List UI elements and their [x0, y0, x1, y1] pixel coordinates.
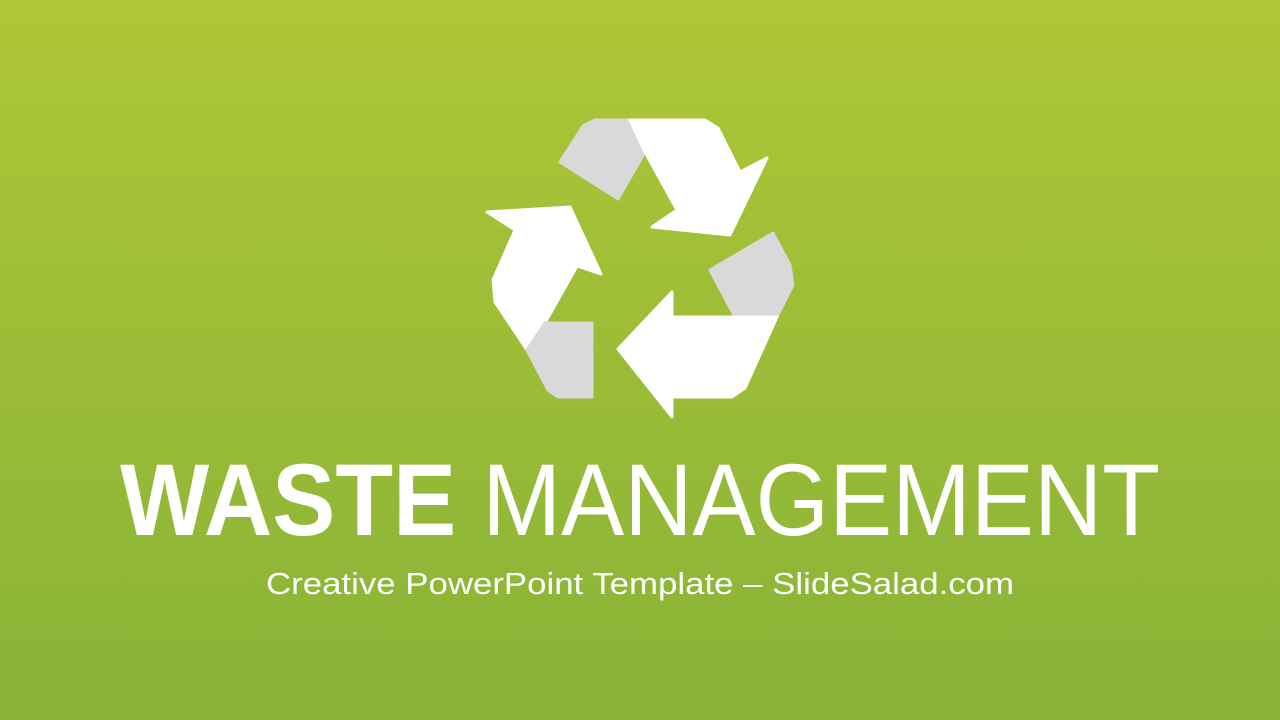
bottom-right arrow white — [618, 292, 777, 417]
top arrow gray segment — [560, 120, 645, 199]
left arrow gray segment — [527, 323, 592, 397]
bottom-right arrow gray segment — [710, 233, 793, 317]
icon: recycle symbol — [487, 120, 793, 417]
subtitle: Creative PowerPoint Template – SlideSalad.com — [266, 566, 1014, 601]
top arrow white — [630, 120, 767, 235]
left arrow white — [487, 207, 601, 350]
title: WASTE MANAGEMENT — [120, 443, 1160, 557]
